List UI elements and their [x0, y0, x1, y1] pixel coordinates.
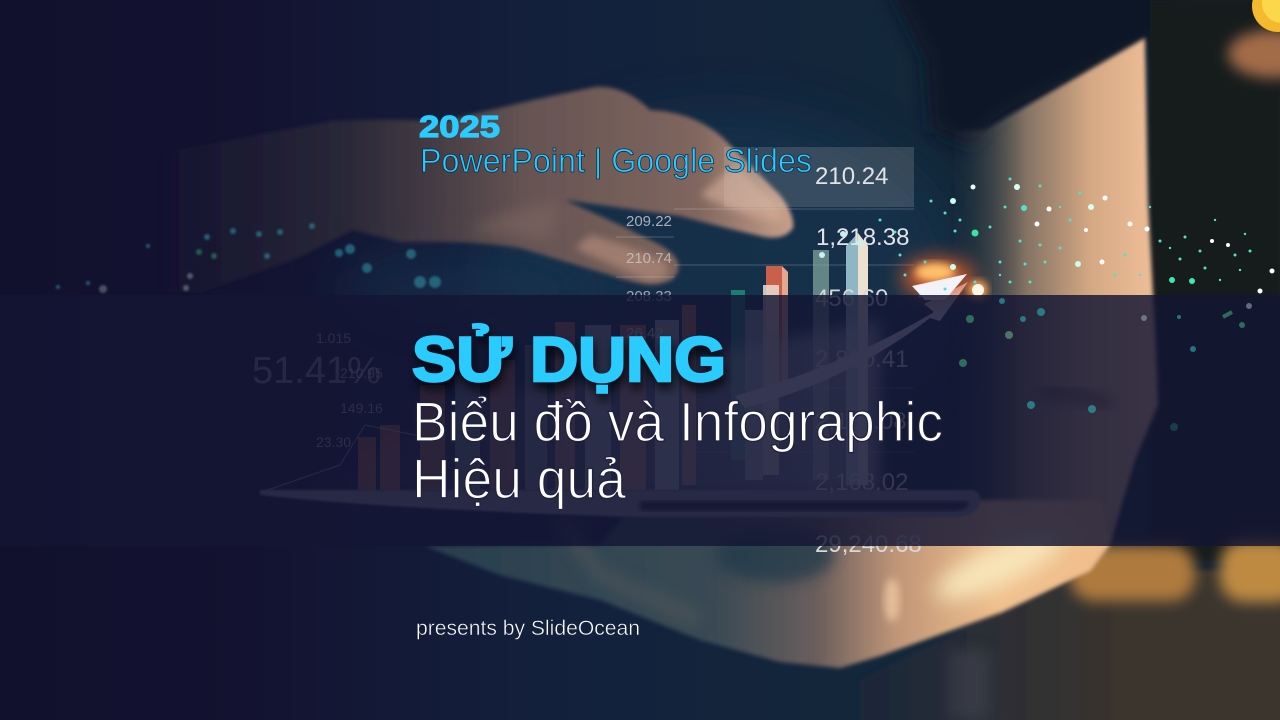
chart values: 51.41% [252, 350, 381, 392]
growth arrow [735, 282, 968, 408]
particles over band [959, 298, 1252, 431]
chart line [262, 425, 440, 492]
chart values: 209.22 [626, 213, 672, 230]
chart values: 149.16 [340, 400, 383, 416]
translucent navy band [0, 295, 1280, 546]
crease under forearm [1040, 392, 1110, 405]
tablet [260, 490, 980, 517]
dark shirt at top right [880, 0, 1180, 150]
chart grid lines [616, 209, 914, 452]
chart values: 26.42 [626, 325, 664, 342]
presenter credit: presents by SlideOcean [416, 616, 640, 640]
tablet glow [300, 320, 880, 495]
chart values: 2,118.08 [815, 408, 907, 435]
chart values: 208.33 [626, 288, 672, 305]
subtitle: platforms: PowerPoint | Google Slides [420, 142, 812, 179]
chart values: 2,168.02 [815, 469, 908, 496]
chart bars [358, 233, 868, 490]
chart values: 2,810.41 [815, 346, 908, 373]
chart values [252, 163, 922, 558]
dark backdrop right of arm [1150, 0, 1280, 560]
chart values: 1,218.38 [816, 224, 909, 251]
upper hand [120, 87, 793, 293]
chart values: 210.74 [626, 250, 672, 267]
particle wave [56, 178, 1274, 298]
title: second line: Biểu đồ và Infographic [412, 390, 943, 453]
chart values: 210.24 [815, 163, 888, 190]
chart values: 29,240.68 [815, 531, 922, 558]
chart values: 456.60 [815, 285, 888, 312]
bottom floor tone [860, 570, 1280, 720]
bokeh lights [1070, 0, 1280, 602]
title: main heading: SỬ DỤNG [412, 324, 726, 395]
chart values: 210.95 [340, 365, 383, 381]
chart values: 1.015 [316, 330, 351, 346]
chart values: 23.30 [316, 434, 351, 450]
lower hand [425, 500, 1110, 668]
title: third line: Hiệu quả [412, 447, 627, 510]
eyebrow: year: 2025 [419, 109, 500, 144]
forearm [950, 38, 1158, 613]
glow [902, 258, 988, 300]
panel behind value [724, 147, 914, 207]
